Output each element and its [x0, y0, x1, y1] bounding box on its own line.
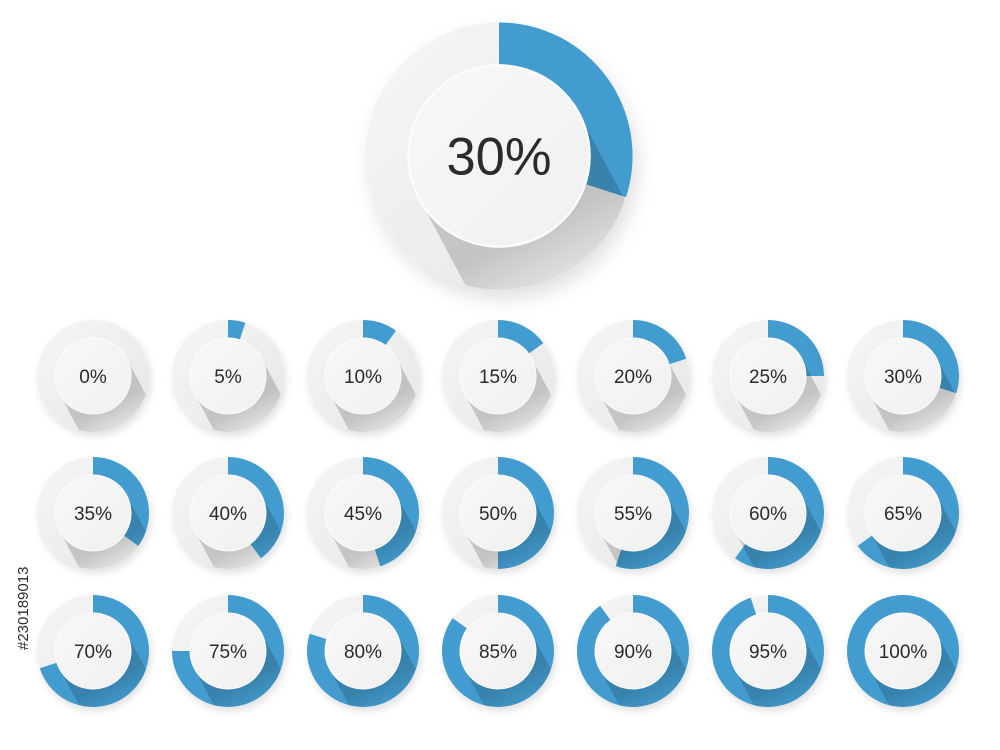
- gauge 70%: 70%: [74, 642, 112, 663]
- gauge 30%: [847, 320, 974, 464]
- gauge 20%: 20%: [614, 367, 652, 388]
- gauge 10%: 10%: [344, 367, 382, 388]
- gauge 80%: 80%: [344, 642, 382, 663]
- gauge 30%: 30%: [884, 367, 922, 388]
- gauge 20%: [577, 320, 704, 464]
- gauge 45%: [307, 457, 434, 601]
- gauge 10%: [307, 320, 434, 464]
- gauge 5%: 5%: [214, 367, 242, 388]
- gauge 65%: [847, 457, 974, 601]
- gauge 75%: [172, 595, 299, 739]
- gauge 15%: 15%: [479, 367, 517, 388]
- gauge 35%: 35%: [74, 504, 112, 525]
- gauge 90%: 90%: [614, 642, 652, 663]
- gauge 90%: [577, 595, 704, 739]
- gauge 35%: [37, 457, 164, 601]
- gauge 65%: 65%: [884, 504, 922, 525]
- stock id vertical text: #230189013: [15, 567, 32, 650]
- gauge 55%: 55%: [614, 504, 652, 525]
- gauge 50%: 50%: [479, 504, 517, 525]
- big gauge 30%: 30%: [446, 129, 552, 187]
- gauge 40%: 40%: [209, 504, 247, 525]
- gauge 60%: [712, 457, 839, 601]
- gauge 75%: 75%: [209, 642, 247, 663]
- big gauge 30%: [365, 22, 668, 367]
- gauge 0%: [37, 320, 164, 464]
- gauge 80%: [307, 595, 434, 739]
- gauge 50%: [442, 457, 569, 601]
- gauge 100%: [847, 595, 974, 739]
- gauge 25%: 25%: [749, 367, 787, 388]
- gauge 95%: 95%: [749, 642, 787, 663]
- gauge 85%: [442, 595, 569, 739]
- gauge 70%: [37, 595, 164, 739]
- gauge 100%: 100%: [879, 642, 927, 663]
- gauge 60%: 60%: [749, 504, 787, 525]
- gauge 85%: 85%: [479, 642, 517, 663]
- gauge 25%: [712, 320, 839, 464]
- gauge 45%: 45%: [344, 504, 382, 525]
- gauge 15%: [442, 320, 569, 464]
- gauge 40%: [172, 457, 299, 601]
- gauge 0%: 0%: [79, 367, 107, 388]
- gauge 95%: [712, 595, 839, 739]
- gauge 55%: [577, 457, 704, 601]
- gauge 5%: [172, 320, 299, 464]
